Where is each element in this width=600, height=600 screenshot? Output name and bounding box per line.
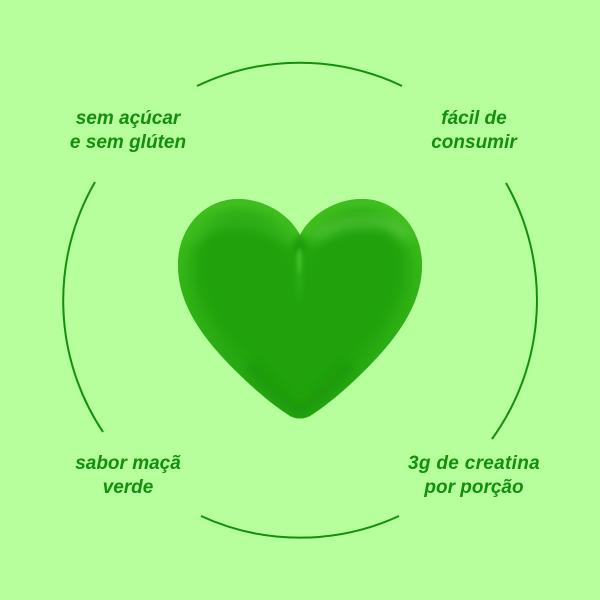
- text: 3g de creatina por porção: por porção: [423, 477, 524, 498]
- text: 3g de creatina por porção: [408, 453, 540, 498]
- text: fácil de consumir: [431, 108, 518, 153]
- text: fácil de consumir: consumir: [431, 132, 518, 153]
- text: sabor maçã verde: [75, 453, 181, 498]
- arc: right: [492, 183, 537, 439]
- text: 3g de creatina por porção: 3g de creatina: [408, 453, 540, 474]
- ring of four arcs: [63, 63, 537, 538]
- arc: top: [197, 63, 402, 86]
- text: sabor maçã verde: verde: [103, 477, 154, 498]
- icon: green 3D heart: [178, 199, 422, 418]
- arc: bottom: [201, 516, 399, 538]
- text: sabor maçã verde: sabor maçã: [75, 453, 181, 474]
- text: fácil de consumir: fácil de: [441, 108, 507, 129]
- infographic canvas: [62, 62, 540, 539]
- arc: left: [63, 182, 103, 432]
- text: sem açúcar e sem glúten: sem açúcar: [76, 108, 182, 129]
- text: sem açúcar e sem glúten: e sem glúten: [70, 132, 186, 153]
- text: sem açúcar e sem glúten: [70, 108, 186, 153]
